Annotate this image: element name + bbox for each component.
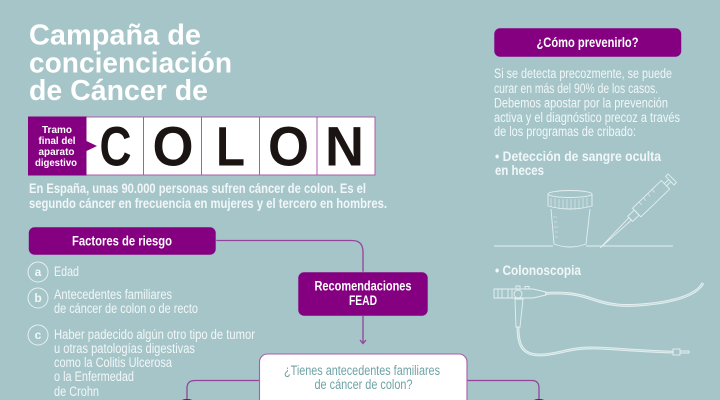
tube, insertion <box>545 283 703 305</box>
jar <box>548 190 592 247</box>
label: Tramo final del aparato digestivo: digestivo <box>35 157 77 169</box>
heading: Detección de sangre oculta en heces: • Detección de sangre oculta <box>495 149 661 164</box>
letters: COLON: N <box>325 114 364 178</box>
label: Tramo final del aparato digestivo <box>28 116 97 176</box>
box: Recomendaciones FEAD <box>298 272 428 316</box>
letters: COLON: L <box>216 114 245 178</box>
text: prevention paragraph: curar en más del 90% de los casos. <box>494 81 658 96</box>
title: de Cáncer de <box>29 75 208 107</box>
heading: Factores de riesgo <box>28 227 216 255</box>
letters: COLON: C <box>100 114 132 178</box>
text: prevention paragraph: Debemos apostar por la prevención <box>494 96 668 110</box>
box: question <box>260 354 467 400</box>
item c: de Crohn <box>54 384 99 399</box>
icon: sample jar and syringe <box>494 174 676 252</box>
box: Recomendaciones FEAD: FEAD <box>349 293 377 308</box>
item c: u otras patologías digestivas <box>54 341 195 356</box>
letters: COLON <box>100 114 364 178</box>
item b <box>28 287 198 316</box>
box: Recomendaciones FEAD: Recomendaciones <box>314 278 412 294</box>
title: Campaña de <box>29 20 201 52</box>
item c: c <box>35 328 42 342</box>
text: prevention paragraph <box>494 66 680 139</box>
text: prevention paragraph: Si se detecta precozmente, se puede <box>494 66 672 81</box>
heading: Detección de sangre oculta en heces <box>495 149 661 178</box>
heading: Colonoscopia: • Colonoscopia <box>495 263 581 278</box>
heading: ¿Cómo prevenirlo? <box>494 28 682 57</box>
list: risk factors <box>28 262 255 399</box>
icon: colonoscope <box>494 283 703 355</box>
title: concienciación <box>29 48 232 80</box>
letters: COLON: O <box>268 114 309 178</box>
item b: Antecedentes familiares <box>54 287 172 302</box>
title <box>29 20 232 107</box>
heading: ¿Cómo prevenirlo?: ¿Cómo prevenirlo? <box>536 35 638 50</box>
text: prevention paragraph: activa y el diagnóstico precoz a través <box>494 110 680 125</box>
intro text: En España, unas 90.000 personas sufren cáncer de colon. Es el <box>29 181 366 196</box>
text: prevention paragraph: de los programas de cribado: <box>494 124 636 139</box>
intro text: segundo cáncer en frecuencia en mujeres y el tercero en hombres. <box>29 196 387 211</box>
connector <box>673 349 680 355</box>
label: Tramo final del aparato digestivo: Tramo <box>42 124 72 136</box>
box: question: de cáncer de colon? <box>314 377 412 392</box>
item a: a <box>35 265 42 279</box>
label: Tramo final del aparato digestivo: aparato <box>38 146 74 158</box>
arrow: recommendations to question <box>360 316 366 344</box>
scope head <box>494 289 546 298</box>
item b: de cáncer de colon o de recto <box>54 301 198 316</box>
tube, umbilical <box>518 327 673 355</box>
connectors: question branches <box>181 380 545 400</box>
heading: Factores de riesgo: Factores de riesgo <box>72 234 172 248</box>
box: question: ¿Tienes antecedentes familiares <box>284 363 440 378</box>
item a <box>28 262 79 282</box>
intro text <box>29 181 387 211</box>
panel: COLON word banner <box>28 114 375 178</box>
item c: Haber padecido algún otro tipo de tumor <box>54 327 255 342</box>
syringe <box>596 174 676 252</box>
item c: o la Enfermedad <box>54 369 134 384</box>
item a: Edad <box>54 264 79 279</box>
item c: como la Colitis Ulcerosa <box>54 355 172 370</box>
item b: b <box>34 291 42 305</box>
heading: Detección de sangre oculta en heces: en heces <box>495 163 544 178</box>
label: Tramo final del aparato digestivo: final del <box>38 135 76 147</box>
grip <box>515 299 523 327</box>
connector: risk factors to recommendations <box>216 240 363 272</box>
item c <box>28 325 255 399</box>
letters: COLON: O <box>152 114 194 178</box>
